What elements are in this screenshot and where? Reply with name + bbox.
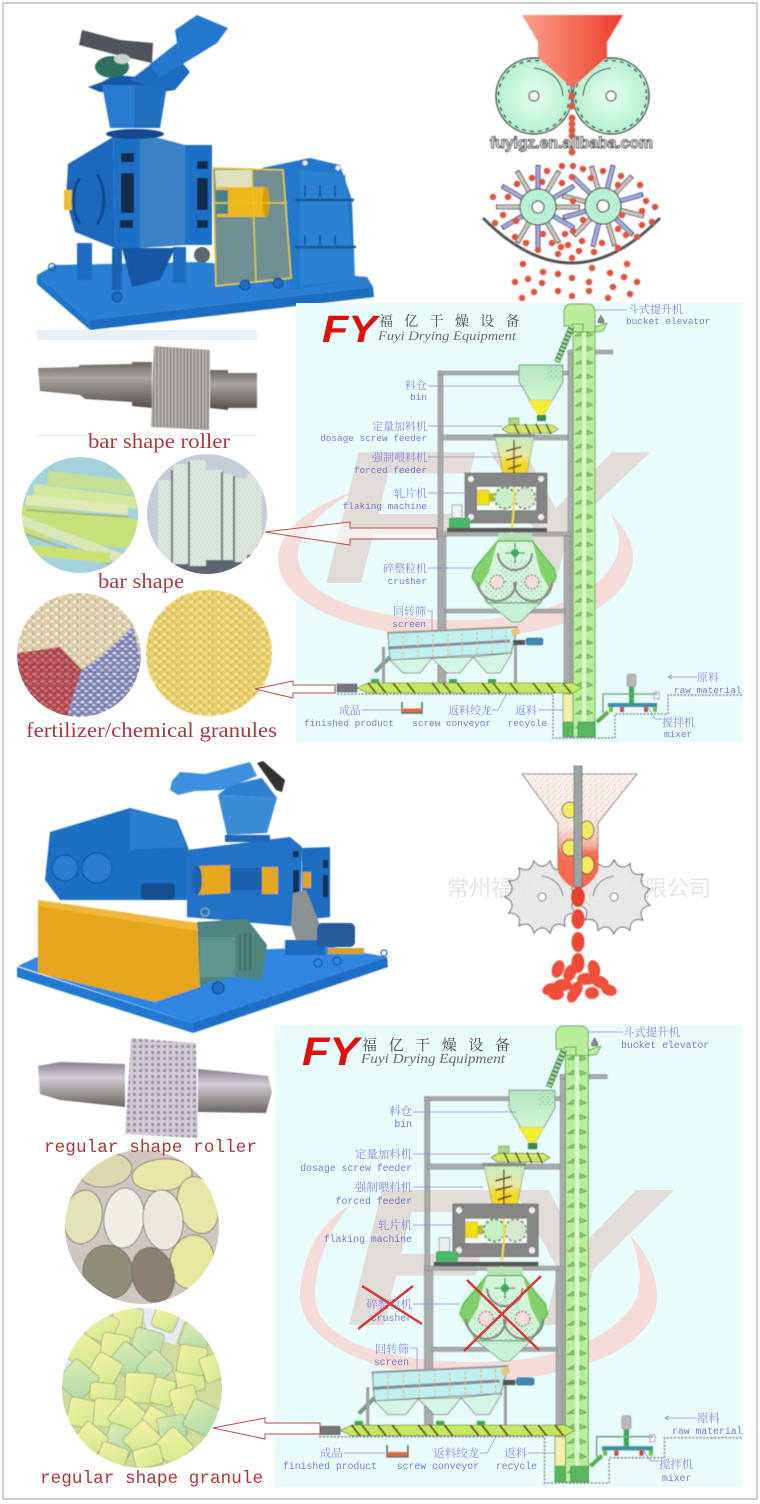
logo: FY Fuyi Drying Equipment: FY <box>322 309 381 351</box>
flaking machine <box>447 473 547 552</box>
arrow: flaking output to bar shape <box>265 522 437 545</box>
label: bin <box>405 378 525 403</box>
forced feeder <box>493 434 535 473</box>
red cross over crusher machine <box>464 1276 541 1351</box>
label: flaking machine <box>324 1218 455 1245</box>
label: bucket elevator: bucket elevator <box>621 1040 709 1051</box>
label: screen: 回转筛 <box>393 604 426 618</box>
photo: yellow chemical granules <box>146 590 272 716</box>
label: crusher crossed out: 碎整粒机 <box>366 1297 413 1311</box>
illustration: smooth roller and crusher diagram: fuyigz.en.alibaba.com <box>490 135 653 152</box>
label: screen: screen <box>392 619 426 630</box>
label: recycle <box>496 1446 555 1472</box>
label: bin: bin <box>410 392 427 403</box>
label: raw material: 原料 <box>697 670 719 684</box>
label: raw material: raw material <box>672 1426 743 1437</box>
label: screw conveyor: screw conveyor <box>397 1461 479 1472</box>
watermark: FY swoosh <box>278 490 633 638</box>
photo: almond shape granules <box>65 1150 219 1304</box>
process machinery drawing repeated <box>319 1026 743 1483</box>
label: flaking machine: flaking machine <box>343 501 427 512</box>
label: forced feeder: 强制喂料机 <box>355 1180 413 1194</box>
label: flaking machine <box>343 486 468 512</box>
watermark: FY letters: FY <box>345 1148 675 1367</box>
arrow: conveyor output to regular granule <box>213 1418 320 1439</box>
caption: bar shape roller: bar shape roller <box>88 429 230 453</box>
label: bin <box>389 1104 516 1130</box>
watermark: FY swoosh <box>300 1205 657 1380</box>
photo: white bar shape product <box>145 454 269 575</box>
label: recycle: recycle <box>496 1461 537 1472</box>
red cross over crusher label <box>358 1286 422 1329</box>
label: dosage screw feeder: 定量加料机 <box>355 1147 413 1161</box>
label: crusher crossed out: crusher <box>371 1313 412 1324</box>
logo: FY Fuyi Drying Equipment: 福亿干燥设备 <box>362 1037 522 1054</box>
logo: FY Fuyi Drying Equipment: Fuyi Drying Equipment <box>360 1051 506 1066</box>
label: finished product <box>283 1446 385 1472</box>
label: dosage screw feeder <box>320 419 503 444</box>
label: finished product: 成品 <box>320 1446 343 1460</box>
light strip under machine photo <box>37 330 257 340</box>
label: screen: screen <box>374 1357 409 1368</box>
label: crusher <box>383 561 473 587</box>
logo: FY Fuyi Drying Equipment: Fuyi Drying Equipment <box>377 328 516 343</box>
photo: mixed fertilizer granules <box>15 590 145 720</box>
label: flaking machine: 轧片机 <box>378 1218 413 1232</box>
label: crusher: crusher <box>388 576 427 587</box>
panel: regular shape process flow <box>275 1025 743 1487</box>
label: screen: 回转筛 <box>375 1342 409 1356</box>
label: mixer <box>643 1450 694 1484</box>
caption: bar shape: bar shape <box>98 569 184 593</box>
arrow: conveyor output to granules <box>255 681 335 698</box>
label: mixer: 搅拌机 <box>659 1457 694 1471</box>
label: bucket elevator: bucket elevator <box>626 316 710 327</box>
label: raw material: 原料 <box>697 1411 720 1425</box>
ground line and pit <box>337 694 743 738</box>
label: forced feeder: forced feeder <box>336 1196 412 1207</box>
photo: regular shape roller <box>38 1038 272 1138</box>
label: bucket elevator <box>595 302 710 327</box>
mixer <box>597 674 659 722</box>
logo: FY Fuyi Drying Equipment: FY <box>302 1030 363 1074</box>
label: recycle: 返料 <box>504 1446 528 1460</box>
caption: regular shape granule: regular shape granule <box>40 1469 263 1489</box>
label: finished product: 成品 <box>339 703 361 717</box>
label: recycle: 返料 <box>515 703 537 717</box>
logo: FY Fuyi Drying Equipment <box>302 1030 522 1074</box>
illustration: smooth roller and crusher diagram <box>483 15 660 298</box>
label: raw material <box>668 670 742 696</box>
illustration: pocket roller and funnel diagram <box>505 766 658 1005</box>
label: recycle: recycle <box>508 718 547 729</box>
recycle tank <box>563 694 573 722</box>
photo: regular shape roller press machine <box>17 761 388 1033</box>
crusher <box>472 533 556 622</box>
label: recycle <box>508 703 563 729</box>
label: crusher: 碎整粒机 <box>383 561 427 575</box>
label: forced feeder <box>336 1180 483 1207</box>
label: mixer <box>648 707 695 740</box>
label: mixer: mixer <box>662 1473 691 1484</box>
photo: bar shape roller <box>38 346 257 430</box>
thin rule under roller <box>37 434 257 436</box>
label: raw material <box>665 1411 743 1437</box>
label: bin: 料仓 <box>405 378 427 392</box>
label: bucket elevator <box>588 1025 709 1051</box>
label: crusher crossed out <box>366 1297 460 1324</box>
photo: bar shape roller press machine <box>37 15 374 330</box>
label: bin: 料仓 <box>389 1104 413 1118</box>
label: bucket elevator: 斗式提升机 <box>628 302 683 316</box>
label: flaking machine: 轧片机 <box>394 486 427 500</box>
label: screw conveyor: 返料绞龙 <box>448 703 492 717</box>
label: forced feeder: 强制喂料机 <box>372 450 427 464</box>
logo: FY Fuyi Drying Equipment: 福亿干燥设备 <box>379 314 531 330</box>
watermark: Changzhou Fuyi company name: 常州福亿干燥设备有限公司 <box>447 876 711 901</box>
dosage screw feeder <box>502 418 558 434</box>
label: forced feeder <box>354 450 502 476</box>
label: dosage screw feeder: 定量加料机 <box>372 419 427 433</box>
watermark: FY letters: FY <box>322 412 651 624</box>
label: finished product <box>304 703 402 729</box>
label: dosage screw feeder: dosage screw feeder <box>300 1163 412 1174</box>
feed bin <box>519 365 563 421</box>
label: screw conveyor: screw conveyor <box>412 718 491 729</box>
photo: green bar shape product <box>20 455 140 575</box>
finished product tray <box>402 702 422 713</box>
process machinery drawing <box>337 304 743 738</box>
label: flaking machine: flaking machine <box>324 1234 412 1245</box>
label: mixer: mixer <box>664 729 692 740</box>
label: screw conveyor <box>412 693 507 729</box>
logo: FY Fuyi Drying Equipment <box>322 309 531 351</box>
label: screen <box>392 604 432 630</box>
label: screw conveyor: 返料绞龙 <box>433 1446 479 1460</box>
label: mixer: 搅拌机 <box>662 715 695 729</box>
screw conveyor <box>337 679 582 693</box>
label: dosage screw feeder <box>300 1147 490 1174</box>
label: screen <box>374 1342 417 1370</box>
label: screw conveyor <box>397 1435 497 1472</box>
label: forced feeder: forced feeder <box>354 465 427 476</box>
caption: regular shape roller: regular shape roller <box>44 1138 257 1158</box>
panel: bar shape process flow <box>296 303 743 742</box>
label: raw material: raw material <box>674 685 742 696</box>
label: dosage screw feeder: dosage screw feeder <box>320 433 427 444</box>
rotary screen <box>375 627 543 683</box>
caption: fertilizer/chemical granules: fertilizer/chemical granules <box>26 718 277 742</box>
steel frame <box>438 350 613 683</box>
label: bin: bin <box>394 1119 412 1130</box>
bucket elevator <box>557 304 607 737</box>
photo: yellow green pillow granules <box>55 1305 226 1470</box>
label: finished product: finished product <box>283 1461 377 1472</box>
label: finished product: finished product <box>304 718 394 729</box>
label: bucket elevator: 斗式提升机 <box>623 1025 681 1039</box>
